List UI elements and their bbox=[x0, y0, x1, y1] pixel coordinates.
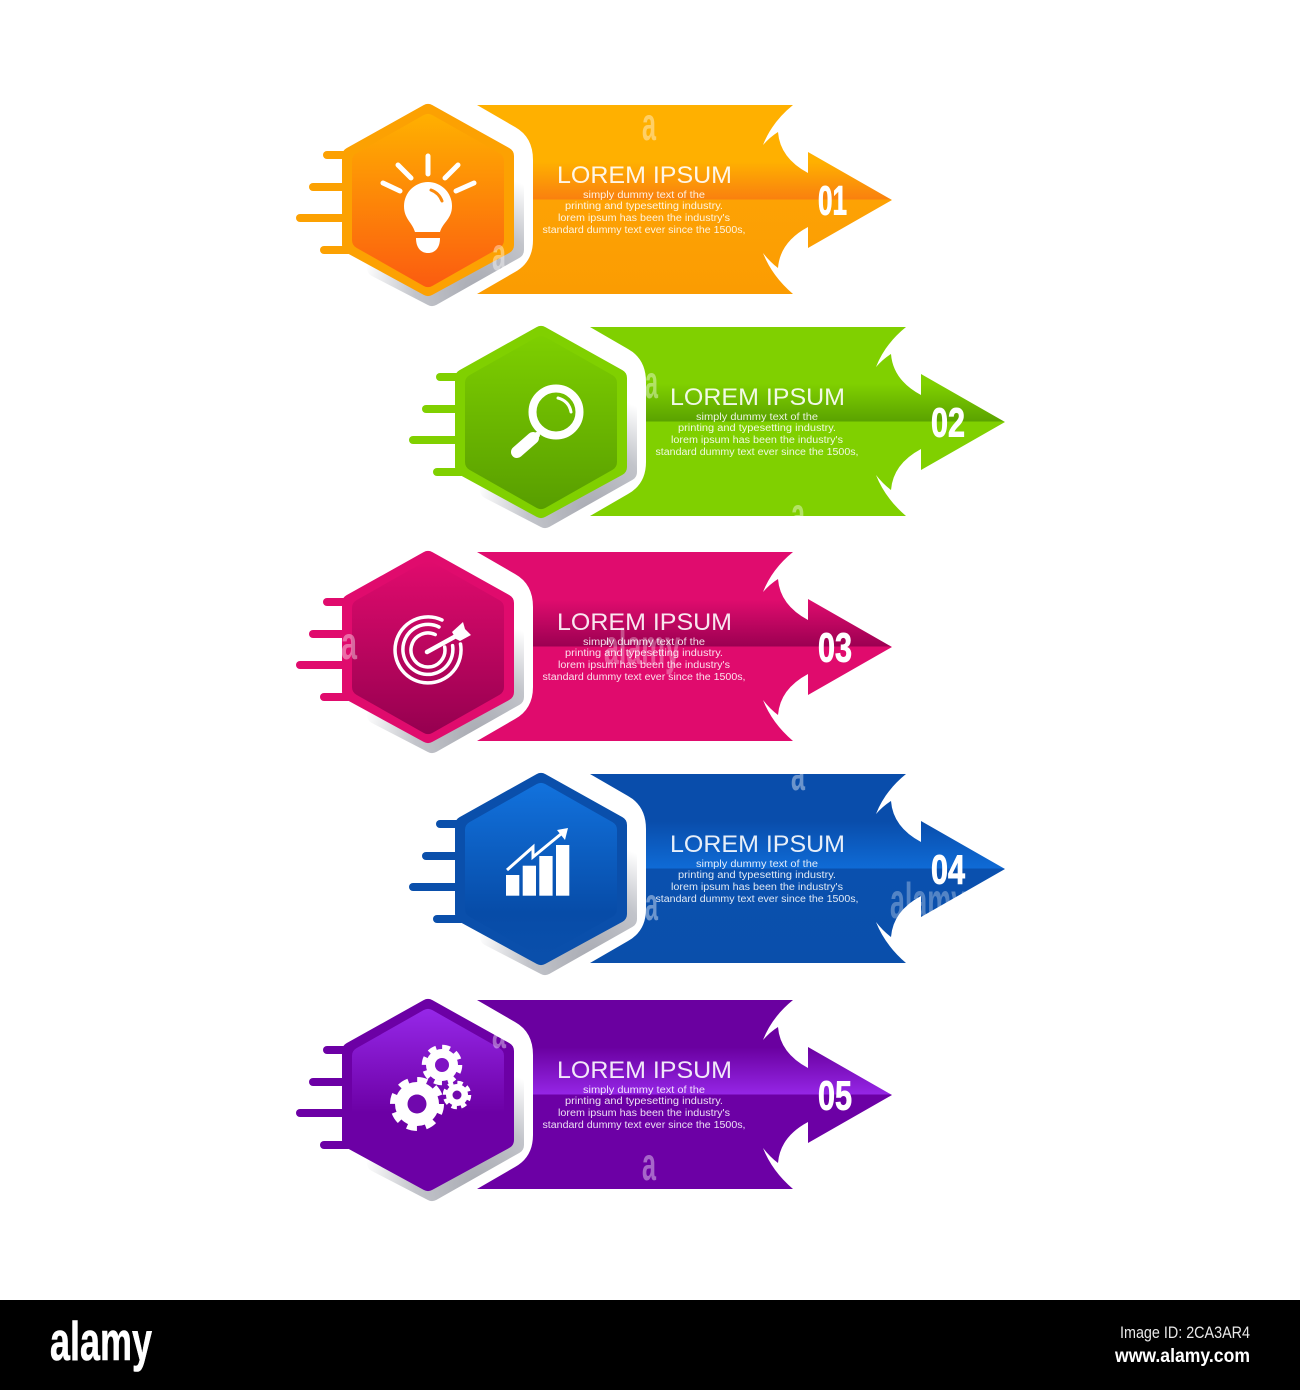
icon: bar chart with arrow bbox=[506, 828, 569, 896]
watermarks: a bbox=[791, 488, 805, 540]
body text 04: printing and typesetting industry. bbox=[678, 870, 836, 881]
website: www.alamy.com bbox=[1114, 1346, 1250, 1367]
body text 02: printing and typesetting industry. bbox=[678, 423, 836, 434]
speed lines 05 bbox=[296, 1046, 353, 1149]
watermarks: a bbox=[645, 356, 658, 408]
panel: step 04 growth bbox=[409, 774, 1005, 966]
heading 03: LOREM IPSUM bbox=[557, 609, 732, 636]
body text 03: lorem ipsum has been the industry's bbox=[558, 660, 730, 671]
body text 05: printing and typesetting industry. bbox=[565, 1096, 723, 1107]
watermarks: a bbox=[341, 617, 357, 669]
body text 05: simply dummy text of the bbox=[583, 1085, 705, 1096]
arrow ribbon 03 bbox=[477, 552, 892, 741]
watermarks: a bbox=[642, 98, 656, 150]
body text 05: lorem ipsum has been the industry's bbox=[558, 1108, 730, 1119]
hexagon badge 05 bbox=[351, 1008, 515, 1192]
body text 01: simply dummy text of the bbox=[583, 190, 705, 201]
arrow ribbon 02 bbox=[590, 327, 1005, 516]
body text 02: standard dummy text ever since the 1500s, bbox=[656, 447, 858, 458]
body text 04: simply dummy text of the bbox=[696, 859, 818, 870]
heading 05: LOREM IPSUM bbox=[557, 1057, 732, 1084]
body text 02: lorem ipsum has been the industry's bbox=[671, 435, 843, 446]
heading 01: LOREM IPSUM bbox=[557, 162, 732, 189]
speed lines 02 bbox=[409, 373, 466, 476]
body text 02: simply dummy text of the bbox=[696, 412, 818, 423]
arrow ribbon 05 bbox=[477, 1000, 892, 1189]
body text 03: printing and typesetting industry. bbox=[565, 648, 723, 659]
icon: magnifying glass bbox=[517, 388, 580, 452]
body text 04 bbox=[656, 859, 858, 905]
body text 01 bbox=[542, 190, 746, 236]
speed lines 03 bbox=[296, 598, 353, 701]
body text 01: standard dummy text ever since the 1500s, bbox=[542, 225, 746, 236]
body text 05 bbox=[542, 1085, 746, 1131]
hexagon badge 04 bbox=[464, 782, 628, 966]
body text 04: lorem ipsum has been the industry's bbox=[671, 882, 843, 893]
heading 02: LOREM IPSUM bbox=[670, 384, 845, 411]
body text 02 bbox=[656, 412, 858, 458]
watermarks: a bbox=[492, 1006, 506, 1058]
arrow ribbon 04 bbox=[590, 774, 1005, 963]
body text 01: printing and typesetting industry. bbox=[565, 201, 723, 212]
arrow ribbon 01 bbox=[477, 105, 892, 294]
panel: step 03 target bbox=[296, 552, 892, 744]
watermarks: alamy bbox=[604, 619, 680, 675]
icon: target with dart bbox=[395, 617, 471, 683]
body text 03 bbox=[542, 637, 746, 683]
hexagon badge 01 bbox=[351, 113, 515, 297]
icon: light bulb bbox=[383, 156, 474, 253]
watermarks bbox=[341, 98, 966, 1190]
hexagon badge 02 bbox=[464, 335, 628, 519]
number 05: 05 bbox=[818, 1072, 852, 1118]
footer bar bbox=[0, 1300, 1300, 1390]
body text 03: simply dummy text of the bbox=[583, 637, 705, 648]
number 01: 01 bbox=[818, 178, 847, 224]
body text 05: standard dummy text ever since the 1500s, bbox=[542, 1120, 746, 1131]
number 04: 04 bbox=[931, 846, 965, 892]
panel: step 05 settings bbox=[296, 1000, 892, 1192]
number 03: 03 bbox=[818, 624, 852, 670]
panel: step 01 idea bbox=[296, 105, 892, 297]
watermarks: a bbox=[791, 748, 805, 800]
body text 03: standard dummy text ever since the 1500s, bbox=[542, 672, 746, 683]
icon: gears bbox=[393, 1047, 470, 1128]
body text 04: standard dummy text ever since the 1500s, bbox=[656, 894, 858, 905]
speed lines 04 bbox=[409, 820, 466, 923]
speed lines 01 bbox=[296, 151, 353, 254]
footer logo: alamy bbox=[50, 1310, 152, 1372]
watermarks: alamy bbox=[890, 873, 966, 929]
body text 01: lorem ipsum has been the industry's bbox=[558, 213, 730, 224]
number 02: 02 bbox=[931, 400, 965, 446]
watermarks: a bbox=[492, 228, 506, 280]
panel: step 02 search bbox=[409, 327, 1005, 519]
watermarks: a bbox=[645, 878, 658, 930]
watermarks: a bbox=[642, 1138, 656, 1190]
hexagon badge 03 bbox=[351, 560, 515, 744]
heading 04: LOREM IPSUM bbox=[670, 831, 845, 858]
image id: Image ID: 2CA3AR4 bbox=[1120, 1323, 1250, 1342]
